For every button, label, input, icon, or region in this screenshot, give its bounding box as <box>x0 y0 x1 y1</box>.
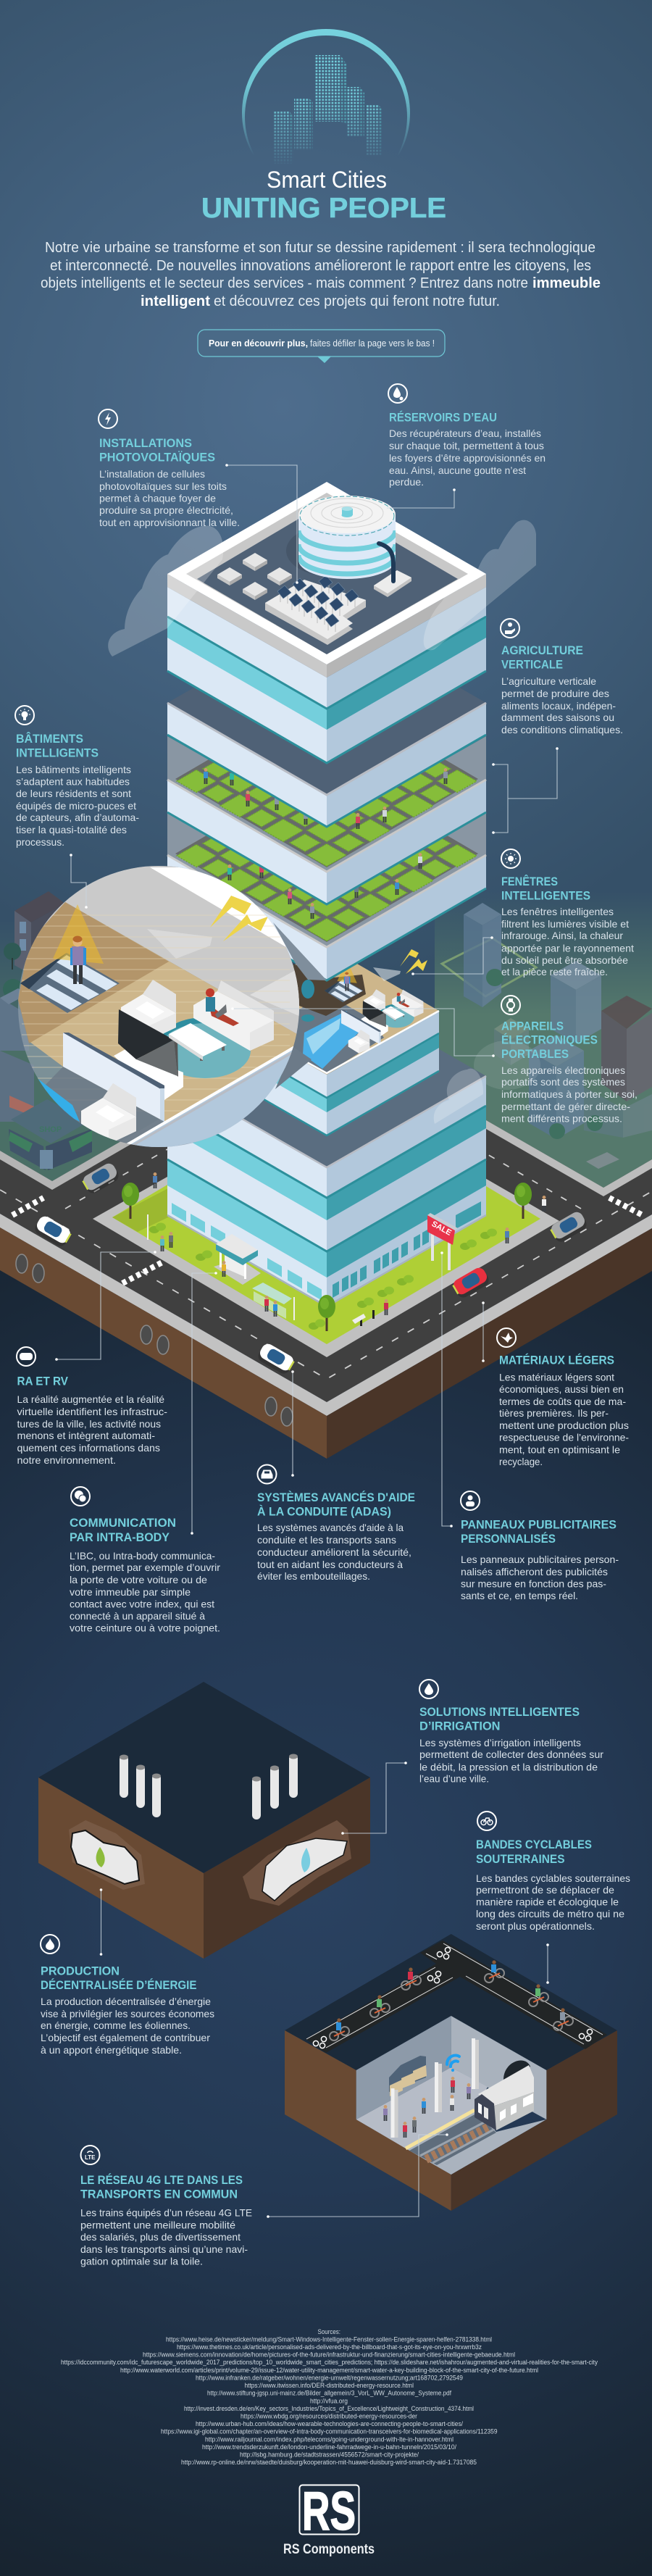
icon: sun <box>501 849 520 868</box>
icon: water drop <box>419 1680 438 1698</box>
panel: reseau 4G LTE: permettent une meilleure mobilité <box>80 2219 235 2230</box>
panel: appareils electroniques portables: portatifs sont des systèmes <box>501 1076 625 1088</box>
panel: systemes avances d'aide a la conduite: À LA CONDUITE (ADAS) <box>257 1504 391 1519</box>
building lot: grass <box>112 1091 540 1344</box>
cycle path <box>306 1941 607 2053</box>
columns <box>391 2038 479 2138</box>
panel: solutions intelligentes d'irrigation: Les systèmes d’irrigation intelligents <box>419 1737 581 1748</box>
panel: appareils electroniques portables: ÉLECTRONIQUES <box>501 1033 598 1046</box>
panel: materiaux legers: économiques, aussi bien en <box>499 1383 624 1395</box>
panel: communication par intra-body: votre ceinture ou à votre poignet. <box>70 1622 220 1633</box>
panel: appareils electroniques portables: APPAREILS <box>501 1020 564 1033</box>
panel: reseau 4G LTE: Les trains équipés d’un réseau 4G LTE <box>80 2207 252 2219</box>
clouds: right <box>424 520 536 650</box>
rooftop boxes <box>217 553 292 600</box>
sources: https://www.wbdg.org/resources/distributed-energy-resources-der <box>241 2413 417 2420</box>
sale sign <box>427 1213 458 1270</box>
panel: fenetres intelligentes: infrarouge. Ainsi, la chaleur <box>501 930 623 941</box>
sources: http://www.waterworld.com/articles/print/volume-29/issue-12/water-utility-management/smart-water-a-key-building-block-of-the-smart-city-of-the-future.html <box>120 2367 538 2374</box>
gas pocket <box>69 1820 145 1890</box>
panel: materiaux legers: respectueuse de l’environne- <box>499 1432 629 1443</box>
panel: installations photovoltaiques: photovoltaïques sur les toits <box>99 480 227 492</box>
panel: RA et RV: tures de la ville, les activité nous <box>17 1418 161 1430</box>
panel: installations photovoltaiques: produire sa propre électricité, <box>99 504 233 516</box>
icon: speech bubbles <box>71 1487 90 1506</box>
street furniture <box>33 1161 589 1376</box>
sources: https://www.thetimes.co.uk/article/personalised-ads-delivered-by-the-billboard-that-s-got-its-eye-on-you-hrxwrrb3z <box>177 2343 482 2351</box>
panel: fenetres intelligentes: du soleil peut être absorbée <box>501 954 628 966</box>
panel: solutions intelligentes d'irrigation: permettent de collecter des données sur <box>419 1748 603 1760</box>
building: lower section <box>167 985 486 1306</box>
panel: reservoirs d'eau: RÉSERVOIRS D’EAU <box>389 410 497 425</box>
panel: solutions intelligentes d'irrigation: SOLUTIONS INTELLIGENTES <box>419 1706 580 1719</box>
panel: production decentralisee d'energie: vise à privilégier les sources économes <box>41 2008 214 2019</box>
panel: production decentralisee d'energie: La production décentralisée d’énergie <box>41 1996 211 2007</box>
panel: batiments intelligents: INTELLIGENTS <box>16 746 99 759</box>
lamp post <box>147 1214 149 1240</box>
bus shelter <box>252 1283 295 1320</box>
panel: materiaux legers: tières premières. Ils per- <box>499 1407 609 1419</box>
building: apartment lower walls <box>214 1011 439 1135</box>
sources: http://www.trendsderzukunft.de/london-underline-fahrradwege-in-u-bahn-tunneln/2015/03/10/ <box>202 2443 456 2451</box>
garden floor 1 <box>167 691 486 872</box>
ring <box>242 29 410 198</box>
icon: lightning <box>99 409 117 428</box>
panel: fenetres intelligentes: apportée par le rayonnement <box>501 942 634 954</box>
water tank <box>298 496 396 581</box>
solar panels <box>265 575 366 645</box>
soil: right face <box>327 1228 652 1459</box>
panel: RA et RV: quement ces informations dans <box>17 1442 160 1454</box>
sources: http://www.stiftung-jgsp.uni-mainz.de/Bilder_allgemein/3_VorL_WW_Autonome_Systeme.pdf <box>207 2390 451 2397</box>
panel: materiaux legers: MATÉRIAUX LÉGERS <box>499 1354 614 1367</box>
panel: solutions intelligentes d'irrigation: l’eau d’une ville. <box>419 1772 489 1784</box>
panel: batiments intelligents <box>15 706 139 848</box>
panel: communication par intra-body: COMMUNICATION <box>70 1517 176 1530</box>
panel: fenetres intelligentes: et la pièce reste fraîche. <box>501 966 608 978</box>
panel: solutions intelligentes d'irrigation: D’IRRIGATION <box>419 1720 500 1733</box>
callout: scroll down <box>198 330 445 363</box>
panel: systemes avances d'aide a la conduite: conducteur améliorent la sécurité, <box>257 1546 411 1558</box>
icon: bicycle <box>477 1812 496 1830</box>
panel: panneaux publicitaires personnalises: PANNEAUX PUBLICITAIRES <box>461 1519 617 1532</box>
panel: RA et RV: La réalité augmentée et la réalité <box>17 1393 164 1405</box>
panel: appareils electroniques portables: PORTABLES <box>501 1048 569 1061</box>
lower gray wall <box>43 1067 164 1145</box>
icon: bird <box>497 1328 516 1347</box>
logo: RS Components: RS Components <box>283 2542 375 2557</box>
panel: reseau 4G LTE: dans les transports ainsi qu’une navi- <box>80 2243 248 2255</box>
furniture <box>20 904 274 1144</box>
panel: systemes avances d'aide a la conduite: tout en aidant les conducteurs à <box>257 1559 403 1570</box>
panel: agriculture verticale: VERTICALE <box>501 658 563 671</box>
bollards and bench <box>352 1310 375 1326</box>
sources: https://www.igi-global.com/chapter/an-overview-of-intra-body-communication-transceivers-for-biomedical-applications/112359 <box>161 2427 497 2435</box>
panel: RA et RV: virtuelle identifient les infrastruc- <box>17 1406 167 1417</box>
cars <box>33 1161 589 1376</box>
panel: installations photovoltaiques: L’installation de cellules <box>99 468 205 480</box>
panel: reservoirs d'eau: Des récupérateurs d’eau, installés <box>389 428 541 439</box>
garden floor 2 <box>167 765 486 947</box>
panel: materiaux legers <box>497 1328 629 1467</box>
panel: RA et RV <box>17 1347 167 1466</box>
intro text: intelligent <box>141 293 210 309</box>
ground floor windows <box>172 1203 322 1300</box>
background: lower dark gradient <box>0 1232 652 2576</box>
panel: batiments intelligents: BÂTIMENTS <box>16 732 83 746</box>
panel: batiments intelligents: Les bâtiments intelligents <box>16 764 131 775</box>
title: UNITING PEOPLE <box>201 193 446 224</box>
building lot: sidewalk <box>93 1087 559 1357</box>
clouds: lower <box>434 1069 483 1124</box>
panel: agriculture verticale: damment des saisons ou <box>501 712 614 723</box>
building: exposed apartment floor <box>214 946 439 1075</box>
title <box>201 167 446 224</box>
trees <box>122 1183 532 1331</box>
title: Smart Cities <box>267 167 387 193</box>
panel: batiments intelligents: tiser la quasi-totalité des <box>16 824 127 835</box>
panel: agriculture verticale <box>501 619 623 735</box>
panel: systemes avances d'aide a la conduite: SYSTÈMES AVANCÉS D'AIDE <box>257 1491 415 1504</box>
panel: production decentralisee d'energie <box>41 1935 214 2056</box>
icon: vr headset <box>17 1347 35 1366</box>
panel: bandes cyclables souterraines: SOUTERRAINES <box>476 1853 565 1866</box>
intro text: immeuble <box>532 275 601 291</box>
panel: fenetres intelligentes <box>501 849 634 978</box>
entrance canopy <box>214 1234 261 1285</box>
water pocket <box>243 1820 351 1906</box>
panel: production decentralisee d'energie: L’objectif est également de contribuer <box>41 2032 210 2043</box>
panel: fenetres intelligentes: Les fenêtres intelligentes <box>501 906 614 917</box>
panel: bandes cyclables souterraines: Les bandes cyclables souterraines <box>476 1872 630 1884</box>
panel: bandes cyclables souterraines: permettront de se déplacer de <box>476 1884 614 1896</box>
panel: communication par intra-body: votre immeuble par simple <box>70 1586 191 1598</box>
sources: https://www.heise.de/newsticker/meldung/Smart-Windows-Intelligente-Fenster-sollen-Energie-sparen-helfen-2781338.html <box>166 2336 492 2343</box>
panel: panneaux publicitaires personnalises: sur mesure en fonction des pas- <box>461 1578 606 1590</box>
panel: appareils electroniques portables: ment différents processus. <box>501 1113 622 1125</box>
pump pad <box>374 570 411 597</box>
station floor and track <box>356 2067 546 2175</box>
panel: batiments intelligents: processus. <box>16 836 64 848</box>
panel: bandes cyclables souterraines: BANDES CYCLABLES <box>476 1838 592 1851</box>
clouds: left <box>108 525 223 656</box>
panel: installations photovoltaiques <box>99 409 240 528</box>
pedestrians <box>153 1172 546 1317</box>
panel: installations photovoltaiques: INSTALLATIONS <box>99 437 192 450</box>
panel: fenetres intelligentes: INTELLIGENTES <box>501 890 590 903</box>
panel: reseau 4G LTE: des salariés, plus de divertissement <box>80 2231 241 2243</box>
panel: systemes avances d'aide a la conduite: conduite et les transports sans <box>257 1534 396 1546</box>
logo: city in a circle <box>242 29 410 161</box>
panel: appareils electroniques portables: permettant de gérer directe- <box>501 1101 630 1112</box>
roof <box>167 482 486 678</box>
panel: materiaux legers: recyclage. <box>499 1456 543 1467</box>
sources: https://www.itwissen.info/DER-distributed-energy-resource.html <box>245 2382 414 2389</box>
sources: http://www.rp-online.de/nrw/staedte/duisburg/kooperation-mit-huawei-duisburg-wird-smart-city-aid-1.7317085 <box>181 2459 477 2466</box>
panel: appareils electroniques portables <box>501 996 638 1125</box>
panel: agriculture verticale: permet de produire des <box>501 688 609 699</box>
panel: fenetres intelligentes: filtrent les lumières visible et <box>501 918 629 930</box>
panel: production decentralisee d'energie: à un apport énergétique stable. <box>41 2044 182 2056</box>
road markings <box>0 1149 652 1379</box>
bushes <box>149 1223 497 1330</box>
sources: https://idccommunity.com/idc_futurescape_worldwide_2017_predictions/top_10_worldwide_smart_cities_predictions; https://de.slideshare.net/ishahrour/augmented-and-virtual-realities-for-the-smart-city <box>61 2359 598 2366</box>
icon: person <box>461 1491 480 1510</box>
sources: http://www.urban-hub.com/ideas/how-wearable-technologies-are-connecting-people-to-smart-cities/ <box>196 2420 463 2427</box>
panel: batiments intelligents: s’adaptent aux habitudes <box>16 775 130 787</box>
shop sign: SHOP <box>39 1125 62 1134</box>
magnifier cone <box>273 922 327 1089</box>
panel: bandes cyclables souterraines: seront plus opérationnels. <box>476 1920 595 1932</box>
sources: Sources: <box>317 2328 340 2335</box>
icon: LTE: LTE <box>85 2154 96 2161</box>
lightning <box>210 896 251 928</box>
panel: appareils electroniques portables: informatiques à porter sur soi, <box>501 1088 638 1100</box>
panel: fenetres intelligentes: FENÊTRES <box>501 875 558 888</box>
panel: installations photovoltaiques: permet à chaque foyer de <box>99 493 216 504</box>
block sidewalks <box>0 1114 652 1196</box>
panel: batiments intelligents: équipés de micro-puces et <box>16 800 136 812</box>
panel: communication par intra-body: PAR INTRA-BODY <box>70 1531 170 1544</box>
panel: communication par intra-body: contact avec votre index, qui est <box>70 1598 214 1610</box>
icon: water drops <box>388 384 407 403</box>
logo: RS Components: RS <box>302 2480 356 2541</box>
panel: materiaux legers: ment, tout en optimisant le <box>499 1443 620 1455</box>
background: upper blue gradient <box>0 0 652 1275</box>
slab under garden 2 <box>167 855 486 980</box>
soil pipes <box>16 1254 293 1426</box>
panel: bandes cyclables souterraines: manière rapide et écologique le <box>476 1896 619 1907</box>
icon: car <box>258 1465 277 1484</box>
panel: bandes cyclables souterraines: long des circuits de métro qui ne <box>476 1908 624 1920</box>
icon: hand with plant <box>501 619 519 638</box>
panel: solutions intelligentes d'irrigation <box>419 1680 603 1784</box>
magnifier: zoomed apartment <box>18 862 304 1152</box>
panel: reservoirs d'eau: perdue. <box>389 476 424 488</box>
sources: http://vfua.org <box>310 2397 348 2404</box>
small lightning bolts <box>373 949 427 981</box>
panel: agriculture verticale: AGRICULTURE <box>501 644 583 657</box>
panel: materiaux legers: mettent une production plus <box>499 1420 629 1431</box>
station walls <box>356 2016 546 2119</box>
panel: panneaux publicitaires personnalises <box>461 1491 619 1601</box>
sale sign: SALE <box>430 1220 453 1238</box>
roof section walls <box>167 587 486 763</box>
panel: agriculture verticale: des conditions climatiques. <box>501 724 623 735</box>
panel: materiaux legers: Les matériaux légers sont <box>499 1371 614 1383</box>
panel: batiments intelligents: de capteurs, afin d’automa- <box>16 812 139 823</box>
panel: agriculture verticale: L’agriculture verticale <box>501 675 596 687</box>
icon: LTE <box>81 2146 100 2164</box>
commuters <box>383 2077 471 2138</box>
cut wall <box>130 1050 293 1147</box>
cyclists <box>330 1960 573 2041</box>
panel: RA et RV: notre environnement. <box>17 1454 116 1466</box>
panel: communication par intra-body <box>70 1487 220 1633</box>
train <box>475 2065 534 2130</box>
sources: http://www.infranken.de/ratgeber/wohnen/energie-umwelt/regenwassernutzung;art168702,2792549 <box>196 2374 463 2381</box>
panel: production decentralisee d'energie: en énergie, comme les éoliennes. <box>41 2019 191 2031</box>
panel: installations photovoltaiques: tout en approvisionnant la ville. <box>99 517 240 528</box>
slab below roof section <box>167 611 486 827</box>
intro text: et interconnecté. De nouvelles innovations amélioreront le rapport entre les citoyens, les <box>50 258 591 274</box>
logo: RS Components <box>283 2480 375 2557</box>
sources: http://www.railjournal.com/index.php/telecoms/going-underground-with-lte-in-hannover.html <box>205 2436 454 2443</box>
ground: outer sidewalk <box>0 1214 652 1416</box>
leader lines <box>57 465 557 2217</box>
panel: communication par intra-body: tion, permet par exemple d’ouvrir <box>70 1562 220 1573</box>
panel: bandes cyclables souterraines <box>476 1812 630 1932</box>
panel: reseau 4G LTE <box>80 2146 252 2267</box>
background city: right block <box>435 891 652 1188</box>
pixel skyline <box>273 55 383 164</box>
panel: reservoirs d'eau <box>388 384 546 488</box>
icon: light bulb <box>15 706 34 725</box>
panel: production decentralisee d'energie: PRODUCTION <box>41 1965 120 1978</box>
panel: panneaux publicitaires personnalises: Les panneaux publicitaires person- <box>461 1554 619 1565</box>
panel: reservoirs d'eau: sur chaque toit, permettent à tous <box>389 440 544 451</box>
panel: RA et RV: menons et intègrent automati- <box>17 1430 155 1441</box>
panel: panneaux publicitaires personnalises: PERSONNALISÉS <box>461 1532 556 1546</box>
panel: production decentralisee d'energie: DÉCENTRALISÉE D’ÉNERGIE <box>41 1978 197 1992</box>
panel: systemes avances d'aide a la conduite: Les systèmes avancés d'aide à la <box>257 1522 404 1533</box>
subterranean block 2: metro and cycle lanes <box>285 1934 617 2211</box>
panel: communication par intra-body: L’IBC, ou Intra-body communica- <box>70 1550 215 1562</box>
callout: scroll down: Pour en découvrir plus, <box>209 338 308 349</box>
sources <box>61 2328 598 2466</box>
icon: flame <box>41 1935 59 1954</box>
ceiling <box>29 862 304 1034</box>
intro text <box>41 240 601 309</box>
panel: reservoirs d'eau: eau. Ainsi, aucune goutte n’est <box>389 464 526 476</box>
leader dots <box>55 464 559 2218</box>
pipes <box>120 1754 298 1820</box>
tunnel <box>503 2061 530 2080</box>
panel: RA et RV: RA ET RV <box>17 1375 68 1388</box>
panel: materiaux legers: termes de coûts que de ma- <box>499 1396 626 1407</box>
callout: scroll down: faites défiler la page vers le bas ! <box>310 338 435 349</box>
ground: road surface <box>0 1087 652 1402</box>
panel: reseau 4G LTE: LE RÉSEAU 4G LTE DANS LES <box>80 2173 243 2187</box>
intro text: objets intelligents et le secteur des services - mais comment ? Entrez dans notre <box>41 275 528 291</box>
sources: https://www.siemens.com/innovation/de/home/pictures-of-the-future/infrastruktur-und-finanzierung/smart-cities-intelligente-gebaeude.html <box>143 2351 515 2358</box>
small room <box>325 960 423 1054</box>
sources: http://lsbg.hamburg.de/stadtstrassen/4556572/smart-city-projekte/ <box>240 2451 419 2458</box>
sources: http://invest.dresden.de/en/Key_sectors_Industries/Topics_of_Excellence/Lightweight_Construction_4374.html <box>184 2405 474 2412</box>
intro text: Notre vie urbaine se transforme et son futur se dessine rapidement : il sera technologique <box>45 240 595 256</box>
panel: appareils electroniques portables: Les appareils électroniques <box>501 1064 625 1076</box>
panel: reservoirs d'eau: les foyers d’être approvisionnés en <box>389 452 546 464</box>
panel: solutions intelligentes d'irrigation: le débit, la pression et la distribution de <box>419 1761 598 1772</box>
panel: batiments intelligents: de leurs résidents et sont <box>16 788 131 799</box>
panel: agriculture verticale: aliments locaux, indépen- <box>501 700 616 712</box>
panel: panneaux publicitaires personnalises: nalisés afficheront des publicités <box>461 1566 608 1577</box>
subterranean block 1: energy and water <box>38 1682 370 1959</box>
icon: watch <box>501 996 520 1014</box>
panel: reseau 4G LTE: gation optimale sur la toile. <box>80 2255 203 2267</box>
gates <box>389 2056 427 2096</box>
intro text: et découvrez ces projets qui feront notre futur. <box>214 293 500 309</box>
panel: panneaux publicitaires personnalises: sants et ce, en temps réel. <box>461 1590 578 1601</box>
panel: installations photovoltaiques: PHOTOVOLTAÏQUES <box>99 451 215 464</box>
background city: left block <box>0 891 290 1181</box>
soil: left face <box>0 1227 327 1459</box>
panel: communication par intra-body: connecté à un appareil situé à <box>70 1610 205 1622</box>
slab under garden 1 <box>167 780 486 904</box>
wifi symbol <box>447 2055 459 2072</box>
panel: reseau 4G LTE: TRANSPORTS EN COMMUN <box>80 2188 238 2201</box>
panel: systemes avances d'aide a la conduite: éviter les embouteillages. <box>257 1570 370 1582</box>
panel: communication par intra-body: la porte de votre voiture ou de <box>70 1574 207 1585</box>
floor <box>18 902 297 1122</box>
panel: systemes avances d'aide a la conduite <box>257 1465 415 1582</box>
